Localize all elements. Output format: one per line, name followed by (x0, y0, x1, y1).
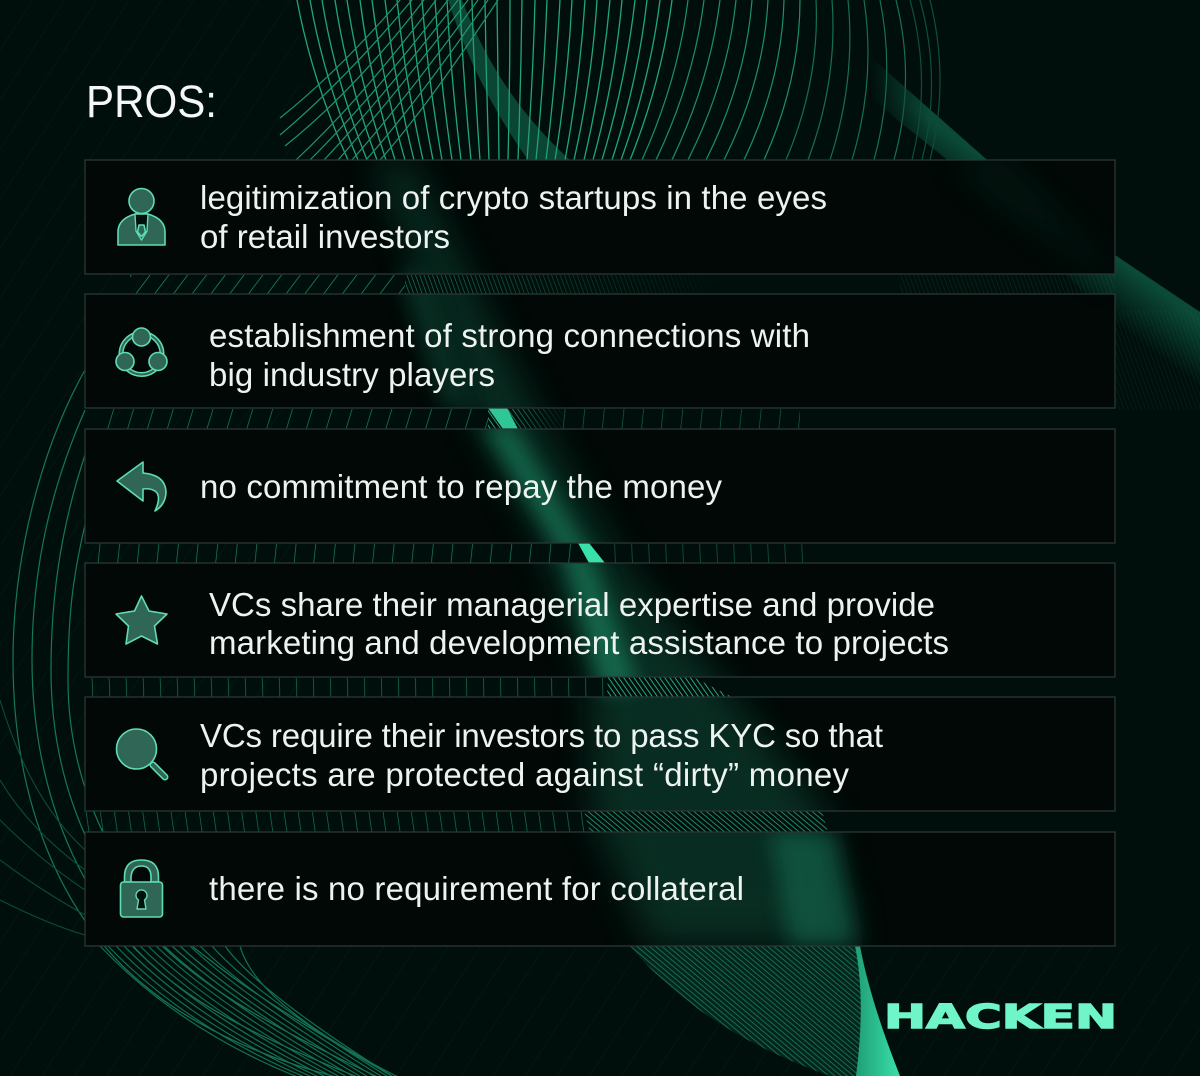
logo: HACKEN: HACKEN (884, 997, 1117, 1036)
card 6: collateral (85, 832, 1115, 946)
icon: return arrow (117, 462, 166, 511)
icon: businessman (118, 188, 165, 245)
gap line hatches (130, 275, 405, 294)
icon: padlock (120, 860, 162, 917)
glowing ribbon inside the cards (372, 160, 855, 946)
text: there is no requirement for collateral (209, 870, 744, 907)
card 5: KYC (85, 697, 1115, 811)
top line fan (297, 0, 672, 160)
dark card backings (85, 160, 1115, 946)
card 2: connections (85, 294, 1115, 408)
text: projects are protected against “dirty” money (200, 756, 850, 793)
bottom left ribbon (100, 946, 400, 1076)
text: establishment of strong connections with (209, 317, 810, 354)
text: marketing and development assistance to projects (209, 624, 949, 661)
bright ribbon top (448, 0, 570, 160)
text: legitimization of crypto startups in the eyes (200, 179, 827, 216)
card 4: expertise (85, 563, 1115, 677)
crossing diagonal lines (280, 0, 498, 160)
text: big industry players (209, 356, 495, 393)
title: PROS: (86, 76, 217, 127)
card 3: no repayment (85, 429, 1115, 543)
bottom right wedge (630, 946, 880, 1076)
icon: star (116, 596, 167, 644)
left arc lines (13, 370, 395, 1076)
icon: connected circle (116, 328, 167, 374)
icon: magnifier (116, 729, 165, 777)
text: VCs require their investors to pass KYC so that (200, 717, 883, 754)
text: VCs share their managerial expertise and provide (209, 586, 935, 623)
text: no commitment to repay the money (200, 468, 722, 505)
right band (879, 66, 1200, 378)
text: of retail investors (200, 218, 450, 255)
card 1: legitimization (85, 160, 1115, 274)
